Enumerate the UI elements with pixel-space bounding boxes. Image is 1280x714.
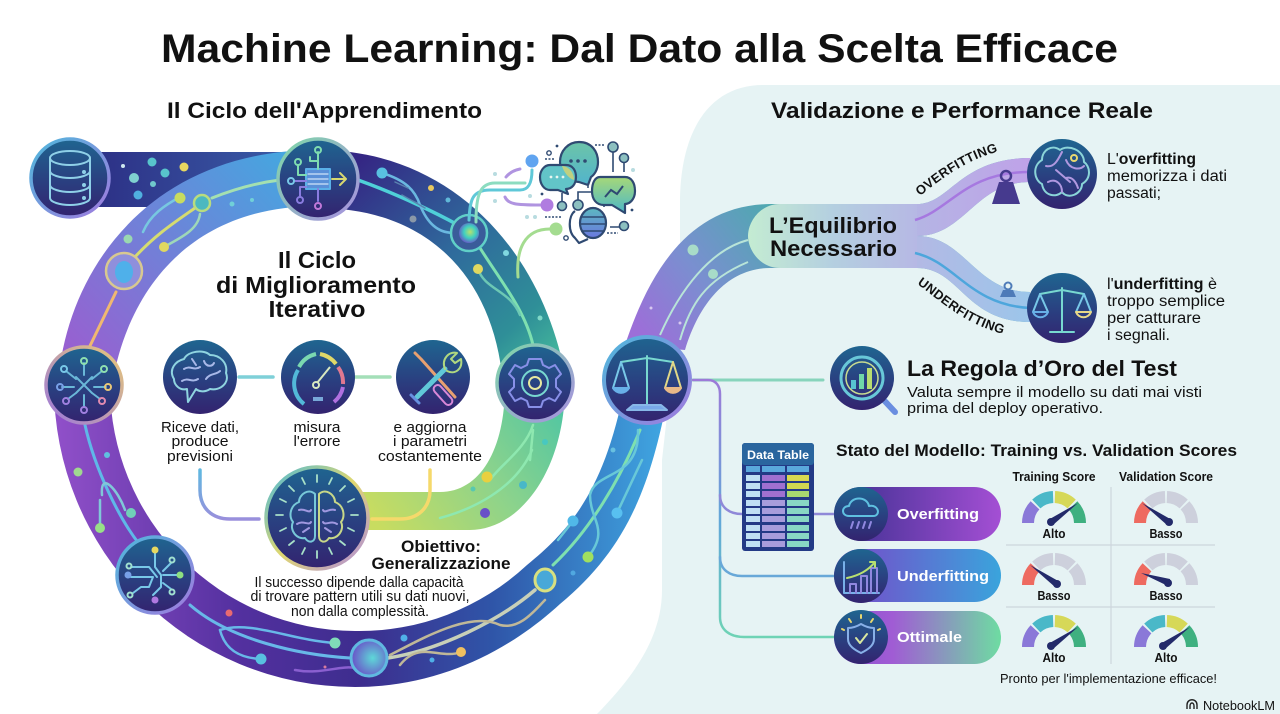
- pill: underfitting: Underfitting: [897, 568, 989, 585]
- golden rule text: Valuta sempre il modello su dati mai visti: [907, 384, 1202, 401]
- text: underfitting: troppo semplice: [1107, 293, 1225, 310]
- gauge: underfitting training: Basso: [1038, 589, 1071, 603]
- objective body: non dalla complessità.: [291, 604, 429, 620]
- notebooklm watermark: NotebookLM: [1203, 699, 1275, 713]
- gauge: optimal validation: [1140, 621, 1192, 665]
- closing note: Pronto per l'implementazione efficace!: [1000, 671, 1217, 686]
- text: underfitting: [1107, 276, 1225, 344]
- golden rule text: prima del deploy operativo.: [907, 400, 1103, 417]
- icon: heavy weight: [992, 171, 1020, 204]
- data table: [742, 443, 814, 551]
- ring data dots: [74, 158, 622, 668]
- objective heading: Generalizzazione: [372, 554, 510, 573]
- step text: receive data: [161, 419, 239, 465]
- gauge: overfitting training: Alto: [1042, 527, 1066, 541]
- node: circuit: [117, 537, 193, 613]
- objective heading: [372, 537, 510, 573]
- step text: update parameters: [378, 419, 482, 465]
- equilibrium band with branches: [625, 158, 1030, 350]
- score column headings: Validation Score: [1119, 470, 1213, 484]
- connectors between cycle steps: [200, 377, 430, 519]
- gauge: underfitting training: [1028, 559, 1080, 603]
- equilibrium heading: [769, 213, 897, 261]
- text: overfitting: [1107, 151, 1227, 202]
- text: overfitting: memorizza i dati: [1107, 168, 1227, 185]
- score column headings: [1012, 470, 1213, 484]
- gauge: optimal training: Alto: [1042, 651, 1066, 665]
- icon: light weight: [1000, 282, 1016, 297]
- learning cycle ring: [54, 150, 668, 687]
- step text: receive data: produce: [172, 433, 228, 450]
- node: large brain goal: [266, 467, 368, 569]
- equilibrium heading: L’Equilibrio: [769, 213, 897, 238]
- node: database: [31, 139, 109, 217]
- node: tools: [396, 340, 470, 414]
- pill: underfitting: [834, 549, 1001, 603]
- gauge: overfitting validation: [1140, 497, 1192, 541]
- gauge: underfitting validation: [1140, 559, 1192, 603]
- cycle center heading: di Miglioramento: [216, 272, 416, 298]
- pill: optimal: Ottimale: [897, 629, 962, 646]
- state table heading: Stato del Modello: Training vs. Validation Scores: [836, 441, 1237, 460]
- node: overfit brain: [1027, 139, 1097, 209]
- background panel: validation: [597, 85, 1280, 714]
- step text: update parameters: i parametri: [393, 433, 467, 450]
- gauge: underfitting validation: Basso: [1150, 589, 1183, 603]
- text: underfitting: l'underfitting è: [1107, 276, 1217, 293]
- node: neural network: [46, 347, 122, 423]
- step text: measure error: [294, 419, 341, 450]
- gauge: optimal training: [1028, 621, 1080, 665]
- title: Machine Learning: Dal Dato alla Scelta Efficace: [161, 27, 1118, 71]
- gauge: overfitting validation: Basso: [1150, 527, 1183, 541]
- step text: receive data: previsioni: [167, 448, 233, 465]
- node: processing chip: [278, 139, 358, 219]
- heading: learning cycle: Il Ciclo dell'Apprendimento: [167, 98, 482, 123]
- objective body: di trovare pattern utili su dati nuovi,: [250, 589, 470, 605]
- label: overfitting curved: OVERFITTING: [916, 144, 997, 194]
- node: gear: [497, 345, 573, 421]
- golden rule text: [907, 356, 1202, 417]
- objective body: Il successo dipende dalla capacità: [254, 575, 464, 591]
- objective body: [250, 575, 470, 620]
- golden rule text: La Regola d’Oro del Test: [907, 356, 1178, 381]
- gauge: optimal validation: Alto: [1154, 651, 1178, 665]
- ring inline orbs: [106, 195, 555, 676]
- cycle center heading: Il Ciclo: [278, 247, 356, 273]
- text: overfitting: passati;: [1107, 185, 1161, 202]
- step text: receive data: Riceve dati,: [161, 419, 239, 436]
- step text: measure error: misura: [294, 419, 341, 436]
- ring circuit traces: [85, 173, 642, 671]
- pill: overfitting: [834, 487, 1001, 541]
- node: error gauge: [281, 340, 355, 414]
- cycle center heading: Iterativo: [268, 296, 366, 322]
- speech bubbles cluster: [469, 142, 635, 277]
- cycle center heading: [216, 247, 416, 322]
- text: underfitting: per catturare: [1107, 310, 1201, 327]
- node: balance: [604, 337, 690, 423]
- step text: update parameters: e aggiorna: [394, 419, 467, 436]
- gauge: overfitting training: [1028, 497, 1080, 541]
- text: underfitting: i segnali.: [1107, 327, 1170, 344]
- label: underfitting curved: UNDERFITTING: [918, 277, 1004, 333]
- text: overfitting: L'overfitting: [1107, 151, 1196, 168]
- node: underfit scale: [1027, 273, 1097, 343]
- score column headings: Training Score: [1012, 470, 1096, 484]
- data table: Data Table: [747, 448, 809, 462]
- step text: measure error: l'errore: [294, 433, 340, 450]
- pill: optimal: [834, 610, 1001, 664]
- tree connectors to states: [693, 380, 834, 637]
- golden rule icon: [830, 346, 895, 412]
- equilibrium heading: Necessario: [770, 236, 897, 261]
- step text: update parameters: costantemente: [378, 448, 482, 465]
- node: brain step: [163, 340, 237, 414]
- heading: validation: Validazione e Performance Reale: [771, 98, 1153, 123]
- score grid lines: [1006, 487, 1215, 664]
- objective heading: Obiettivo:: [401, 537, 481, 556]
- pill: overfitting: Overfitting: [897, 506, 979, 523]
